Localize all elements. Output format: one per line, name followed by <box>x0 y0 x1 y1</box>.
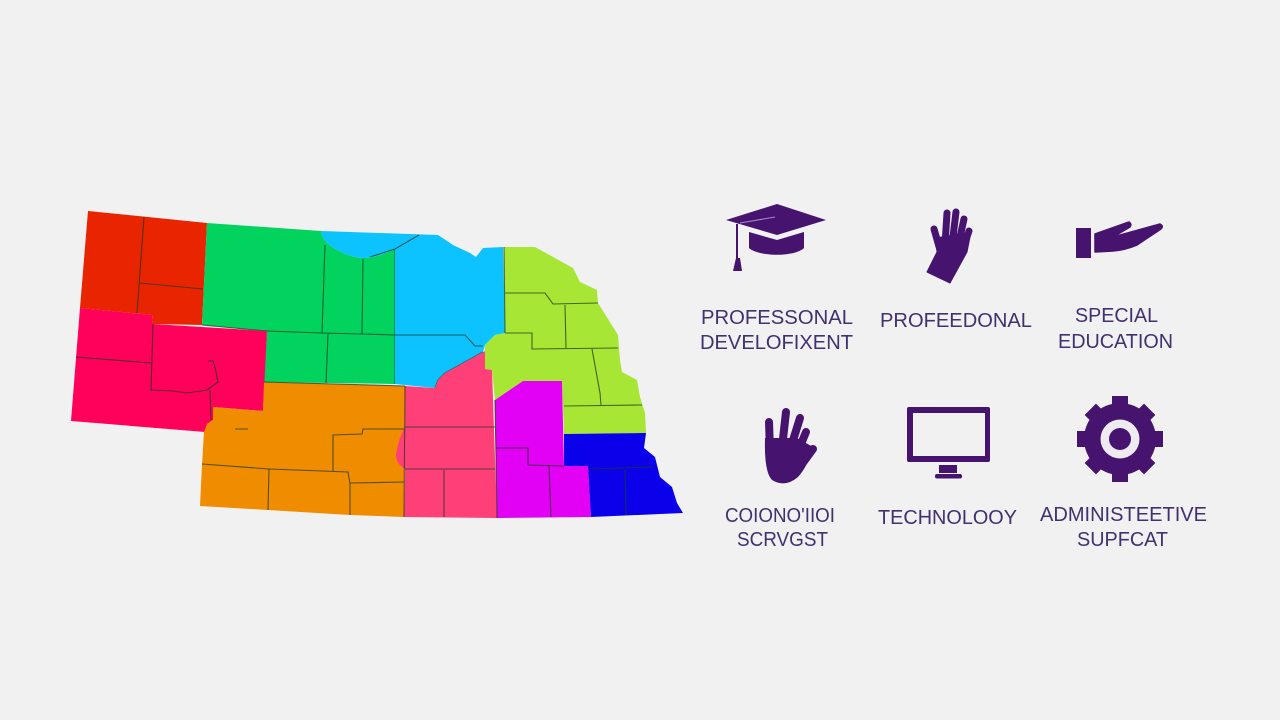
label: administrative support <box>1040 504 1207 551</box>
icon: open hand with cuff <box>1076 222 1162 258</box>
region: lime <box>485 247 646 434</box>
label: professional development <box>700 307 853 354</box>
region: magenta <box>495 381 591 518</box>
region: green <box>202 223 395 384</box>
label: technology: TECHNOLOOY <box>878 507 1017 529</box>
label: special education: EDUCATION <box>1058 331 1173 353</box>
region: coral <box>396 351 497 518</box>
label: special education: SPECIAL <box>1075 305 1158 327</box>
region: orange <box>200 382 405 517</box>
label: professional development: DEVELOFIXENT <box>700 332 853 354</box>
region: crimson <box>71 308 267 432</box>
label: professional development: PROFESSONAL <box>701 307 853 329</box>
region: red <box>80 211 207 325</box>
label: professional: PROFEEDONAL <box>880 310 1032 332</box>
label: counseling support: COIONO'IIOI <box>725 505 835 527</box>
label: counseling support <box>725 505 835 551</box>
icon: raised hand <box>765 412 813 483</box>
icon: graduation cap <box>726 204 826 271</box>
region: dark blue <box>564 433 683 517</box>
map: colored regions <box>71 211 683 518</box>
icon: gloved hand <box>927 212 971 283</box>
icon: computer monitor <box>907 407 990 478</box>
label: administrative support: SUPFCAT <box>1077 529 1168 551</box>
label: counseling support: SCRVGST <box>737 529 828 551</box>
icon: gear <box>1077 396 1163 482</box>
region: sky blue <box>321 231 505 388</box>
label: special education <box>1058 305 1173 353</box>
label: administrative support: ADMINISTEETIVE <box>1040 504 1207 526</box>
